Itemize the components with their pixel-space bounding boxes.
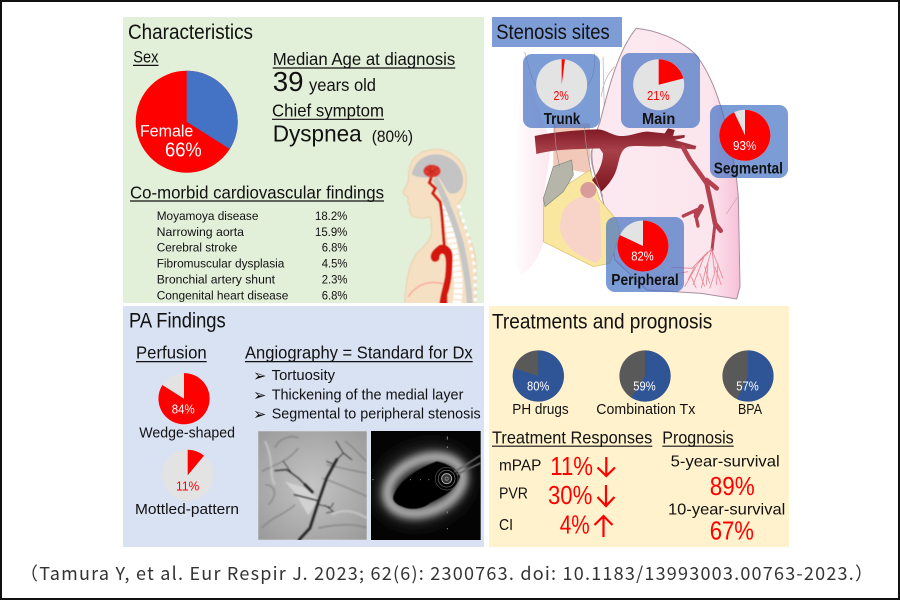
chief symptom: Dyspnea	[273, 121, 363, 147]
pie chart: sex	[136, 71, 238, 173]
co-morbid table	[157, 209, 348, 302]
co-morbid table: 6.8%	[322, 241, 348, 255]
co-morbid table: Bronchial artery shunt	[157, 272, 276, 286]
pie chart: wedge-shaped: Wedge-shaped	[139, 424, 235, 441]
pie chart: combination therapy: 59%	[633, 379, 656, 393]
median age: Median Age at diagnosis	[273, 49, 456, 69]
heading: treatments and prognosis: Treatments and prognosis	[492, 310, 712, 333]
illustration: body with moyamoya vessels	[403, 149, 476, 305]
callout: main: 21%	[647, 89, 670, 103]
heading: characteristics: Characteristics	[128, 21, 253, 44]
prognosis: 5-year-survival	[671, 454, 780, 471]
angiography findings list: Tortuosity	[272, 368, 336, 384]
co-morbid table: Narrowing aorta	[157, 225, 244, 239]
callout: trunk: Trunk	[544, 111, 581, 128]
callout: trunk	[523, 54, 600, 128]
co-morbid table: 2.3%	[322, 272, 348, 286]
angiography findings list: ➢	[253, 385, 266, 404]
callout: trunk: 2%	[554, 89, 569, 103]
heading: PA findings: PA Findings	[129, 310, 226, 333]
treatment responses: Treatment Responses	[492, 427, 653, 447]
pie chart: PH drugs	[512, 350, 569, 418]
panel: characteristics	[123, 17, 484, 305]
callout: segmental	[710, 105, 788, 178]
pie chart: mottled-pattern: Mottled-pattern	[135, 501, 239, 518]
prognosis: Prognosis	[662, 427, 734, 447]
treatment responses: mPAP	[499, 458, 541, 475]
image: angiogram	[258, 431, 367, 540]
treatment responses: 4%	[560, 509, 590, 539]
callout: segmental: 93%	[733, 139, 756, 153]
sex heading: Sex	[133, 47, 159, 66]
pie chart: PH drugs: PH drugs	[512, 401, 569, 418]
heading: stenosis sites: Stenosis sites	[496, 21, 610, 44]
pie chart: sex: 66%	[165, 140, 202, 162]
callout: peripheral	[606, 217, 684, 292]
arrow: mPAP down	[598, 457, 615, 476]
co-morbid table: 4.5%	[322, 257, 348, 271]
prognosis	[662, 427, 785, 545]
pie chart: wedge-shaped	[139, 373, 235, 441]
co-morbid heading: Co-morbid cardiovascular findings	[130, 182, 384, 202]
pie chart: combination therapy: Combination Tx	[596, 401, 696, 418]
prognosis: 89%	[710, 471, 755, 501]
co-morbid table: Moyamoya disease	[157, 209, 259, 223]
illustration: lungs, heart and pulmonary artery	[512, 28, 740, 299]
median age: years old	[309, 75, 376, 95]
pie chart: PH drugs: 80%	[527, 379, 549, 393]
angiography findings list: Segmental to peripheral stenosis	[272, 406, 481, 422]
callout: main: Main	[642, 111, 675, 128]
pie chart: combination therapy	[596, 350, 696, 418]
angiography findings list: ➢	[253, 366, 266, 385]
co-morbid table: 15.9%	[315, 225, 347, 239]
panel: treatments and prognosis	[489, 306, 789, 547]
co-morbid table: 6.8%	[322, 288, 348, 302]
arrow: PVR down	[598, 485, 614, 506]
angiography findings list	[253, 366, 481, 423]
image: optical coherence tomography	[363, 430, 484, 540]
arrow: CI up	[594, 516, 612, 537]
treatment responses: CI	[499, 517, 513, 534]
co-morbid table: Congenital heart disease	[157, 288, 289, 302]
callout: main	[621, 53, 700, 128]
treatment responses: PVR	[499, 485, 528, 502]
median age	[273, 49, 456, 97]
median age: 39	[273, 66, 304, 97]
chief symptom: (80%)	[372, 128, 413, 146]
callout: segmental: Segmental	[714, 160, 783, 177]
pie chart: mottled-pattern: 11%	[176, 479, 199, 493]
chief symptom	[272, 101, 413, 147]
co-morbid table: Fibromuscular dysplasia	[157, 257, 285, 271]
chief symptom: Chief symptom	[272, 101, 384, 121]
pie chart: BPA	[722, 350, 774, 418]
prognosis: 67%	[710, 515, 754, 545]
panel: stenosis sites	[492, 17, 788, 299]
pie chart: BPA: 57%	[736, 379, 759, 393]
perfusion heading: Perfusion	[136, 342, 207, 362]
callout: peripheral: 82%	[631, 250, 654, 264]
panel: PA findings	[123, 306, 484, 547]
treatment responses: 11%	[550, 451, 593, 481]
co-morbid table: Cerebral stroke	[157, 241, 238, 255]
angiography heading: Angiography = Standard for Dx	[245, 342, 473, 362]
pie chart: sex: Female	[140, 122, 193, 141]
prognosis: 10-year-survival	[668, 501, 785, 518]
angiography findings list: ➢	[253, 404, 266, 423]
pie chart: wedge-shaped: 84%	[172, 402, 195, 416]
citation footer: （Tamura Y, et al. Eur Respir J. 2023; 62(6): 2300763. doi: 10.1183/13993003.00763-2023.）	[20, 560, 873, 586]
callout: peripheral: Peripheral	[611, 272, 679, 289]
treatment responses	[492, 427, 653, 539]
angiography findings list: Thickening of the medial layer	[272, 387, 464, 403]
treatment responses: 30%	[548, 480, 592, 510]
pie chart: BPA: BPA	[738, 401, 762, 418]
pie chart: mottled-pattern	[135, 450, 239, 518]
co-morbid table: 18.2%	[315, 209, 347, 223]
